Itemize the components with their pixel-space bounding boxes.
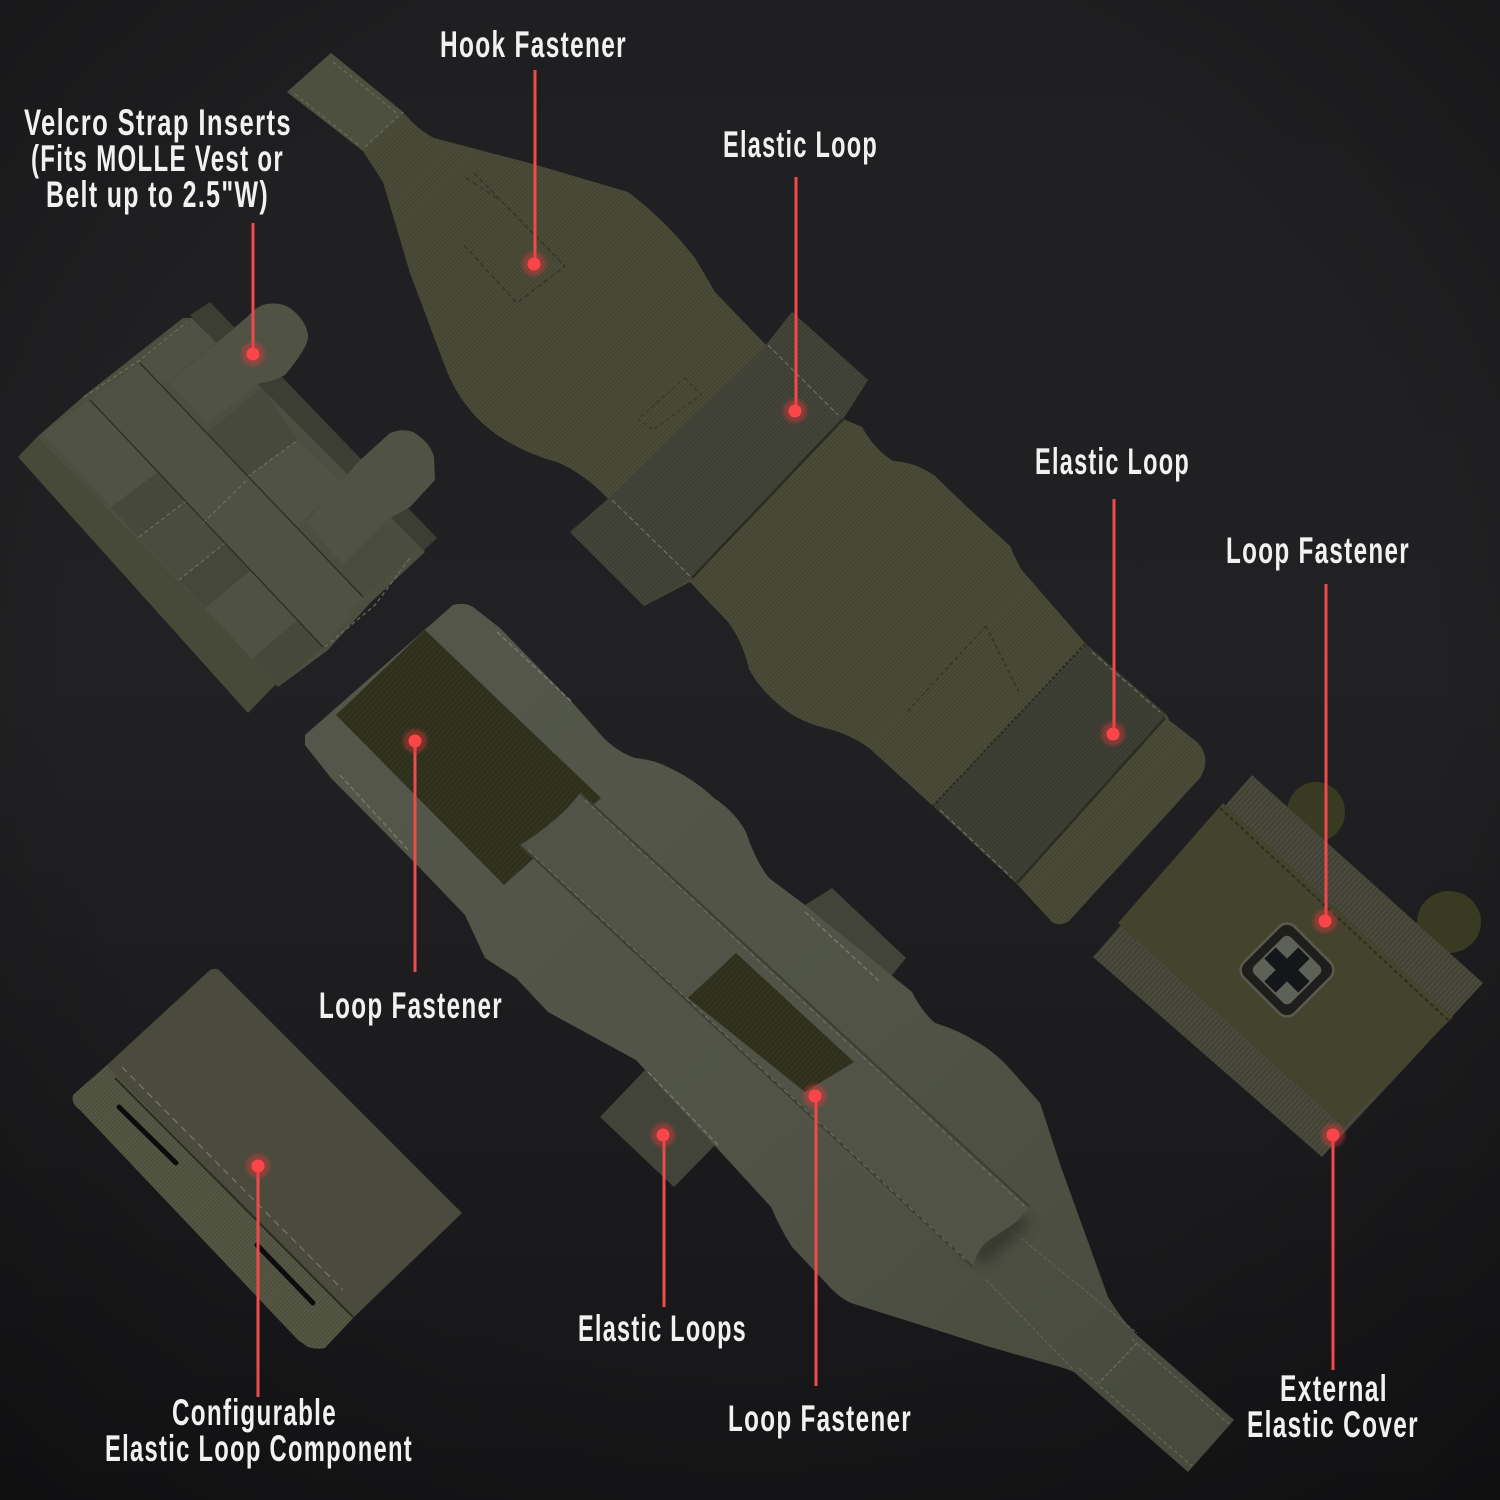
callout: configurable elastic loop component (105, 1154, 413, 1469)
callout: external elastic cover: External (1280, 1368, 1388, 1409)
callout: elastic loop right (1035, 441, 1190, 746)
panel: velcro strap inserts component (18, 302, 437, 713)
back rail (190, 302, 437, 552)
base body (37, 318, 425, 687)
seam and stitching (1099, 1343, 1137, 1383)
callout: configurable elastic loop component: Configurable (172, 1392, 337, 1433)
callout: elastic loops (578, 1123, 747, 1349)
elastic tab lower (600, 1070, 720, 1187)
callout: configurable elastic loop component: Elastic Loop Component (105, 1428, 413, 1469)
panel: configurable elastic loop component (73, 969, 462, 1349)
callout: external elastic cover (1247, 1123, 1419, 1445)
callout: velcro strap inserts (24, 102, 292, 366)
callout: loop fastener center: Loop Fastener (728, 1398, 912, 1439)
first-aid cross patch (1236, 919, 1338, 1021)
callout: velcro strap inserts: (Fits MOLLE Vest or (31, 138, 284, 179)
flap end shadow (965, 1210, 1030, 1265)
cover tab circles (1287, 782, 1345, 842)
loop velcro area (1118, 803, 1453, 1127)
outer rail (18, 437, 277, 713)
elastic tab right (805, 888, 906, 985)
velcro strap tab 1 (170, 304, 308, 423)
callout: velcro strap inserts: Velcro Strap Inserts (24, 102, 292, 143)
elastic loop upper band (570, 312, 868, 606)
callout: loop fastener left (319, 729, 503, 1026)
callout: loop fastener on cover (1226, 530, 1410, 933)
callout: external elastic cover: Elastic Cover (1247, 1404, 1419, 1445)
callout: elastic loops: Elastic Loops (578, 1308, 747, 1349)
panel: upper strap with hook fastener and elastic loops (287, 53, 1205, 924)
callout: loop fastener on cover: Loop Fastener (1226, 530, 1410, 571)
inner loop fastener velcro (688, 953, 854, 1092)
velcro strap tab 2 (307, 430, 435, 565)
right webbing cells (140, 318, 215, 386)
callout: loop fastener left: Loop Fastener (319, 985, 503, 1026)
hook fastener stitching (462, 173, 565, 303)
elastic loop lower band (933, 644, 1167, 883)
callout: hook fastener (440, 24, 627, 276)
loop fastener velcro top (336, 630, 601, 885)
hook tab end (287, 53, 403, 151)
callout: velcro strap inserts: Belt up to 2.5"W) (46, 174, 269, 215)
panel: external elastic cover with patch (1093, 775, 1483, 1157)
long central flap (520, 793, 1030, 1267)
main webbing strap (90, 363, 363, 647)
callout: loop fastener center (728, 1084, 912, 1439)
panel: lower strap with loop fasteners (305, 604, 1234, 1472)
callout: elastic loop right: Elastic Loop (1035, 441, 1190, 482)
callout: elastic loop upper: Elastic Loop (723, 124, 878, 165)
cover body (1093, 775, 1483, 1157)
callout: hook fastener: Hook Fastener (440, 24, 627, 65)
callout: elastic loop upper (723, 124, 878, 423)
left webbing cells (43, 400, 158, 507)
